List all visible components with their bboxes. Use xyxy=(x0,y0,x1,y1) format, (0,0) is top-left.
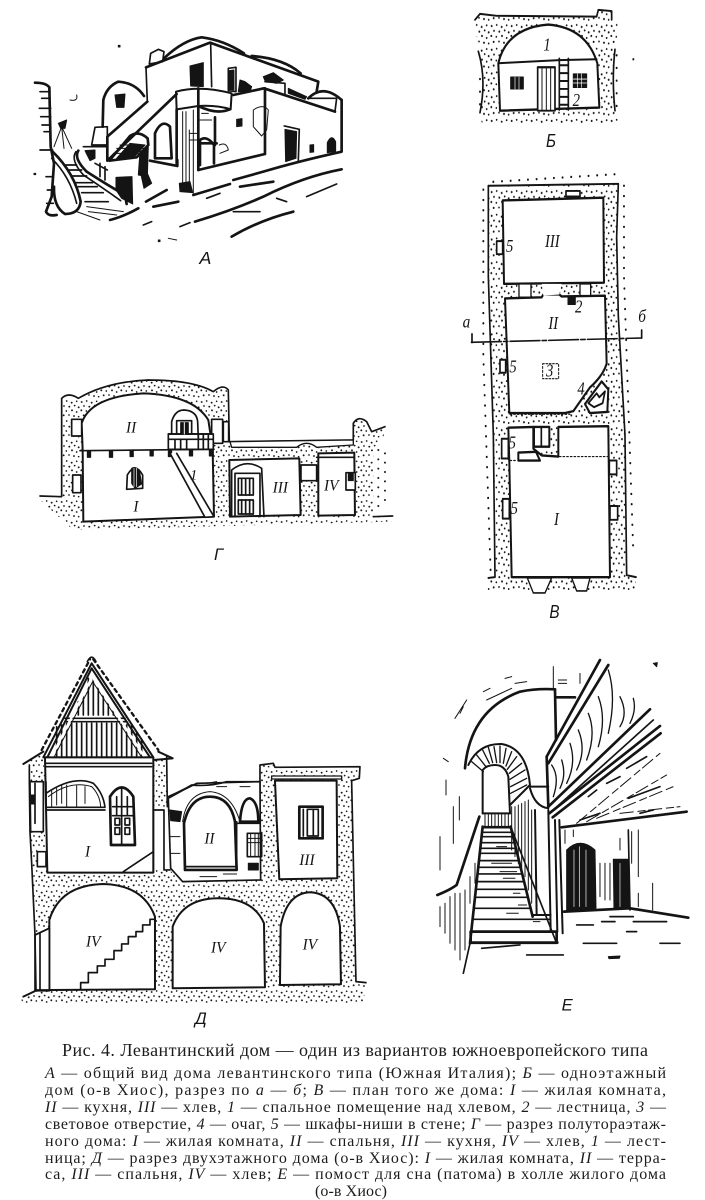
number labels: 1 xyxy=(543,37,551,55)
lower walls xyxy=(107,88,342,177)
entrance openings xyxy=(527,578,590,593)
doors xyxy=(116,126,336,204)
room I with entrance bay xyxy=(508,426,610,577)
room labels: II xyxy=(203,830,215,847)
left wall xyxy=(437,758,479,973)
left ground-floor passage xyxy=(23,928,49,997)
upper window xyxy=(172,410,198,438)
floor beam xyxy=(80,449,214,457)
room labels xyxy=(506,233,585,529)
main room xyxy=(82,393,214,522)
room II kitchen xyxy=(505,294,607,413)
section line а-б: а xyxy=(463,311,470,332)
caption title: Рис. 4. Левантинский дом — один из вариантов южноевропейского типа xyxy=(62,1040,648,1060)
room labels: 3 xyxy=(545,362,553,381)
stippled walls xyxy=(475,10,620,123)
passage and room IV xyxy=(301,453,355,516)
door xyxy=(538,67,555,111)
lower window xyxy=(127,467,143,489)
room labels: III xyxy=(544,233,560,251)
balcony xyxy=(168,434,213,449)
hearth 4 xyxy=(585,381,608,413)
ground strokes xyxy=(34,45,342,242)
roof gable xyxy=(43,663,153,757)
cupboards xyxy=(518,427,549,461)
room labels: 2 xyxy=(575,298,582,317)
tripod ornament xyxy=(54,120,72,148)
room III xyxy=(229,458,301,517)
letter В: В xyxy=(549,602,560,623)
arch over stairs xyxy=(468,744,530,813)
dotted lines xyxy=(510,283,608,577)
letter Е: Е xyxy=(562,996,574,1015)
drawing Б: section of one-storey house: 2 xyxy=(573,92,580,110)
balcony and arch xyxy=(176,88,232,193)
vault curve xyxy=(455,667,580,768)
arched window xyxy=(110,787,135,845)
room labels: IV xyxy=(323,478,340,495)
room labels xyxy=(84,830,319,957)
vaulted room xyxy=(498,25,599,111)
room labels: 5 xyxy=(509,435,516,453)
column xyxy=(530,787,563,933)
outer right dots xyxy=(378,450,385,510)
floor strokes xyxy=(482,663,680,959)
letter А: А xyxy=(198,248,211,268)
room labels: 5 xyxy=(509,358,517,377)
plan outline xyxy=(488,184,636,578)
room labels xyxy=(125,420,340,516)
room III xyxy=(272,776,342,879)
shaft hatching xyxy=(512,800,532,903)
outer dots xyxy=(483,174,633,573)
ladder xyxy=(559,59,568,110)
windows xyxy=(511,74,587,89)
room labels: IV xyxy=(210,940,227,957)
room labels: I xyxy=(84,844,91,861)
room labels: III xyxy=(298,852,316,869)
caption body: ница; Д — разрез двухэтажного дома (о-в Хиос): I — жилая комната, II — терра- xyxy=(45,1150,666,1167)
caption body: II — кухня, III — хлев, 1 — спальное помещение над хлевом, 2 — лестница, 3 — xyxy=(44,1099,667,1116)
room labels: 1 xyxy=(190,467,197,483)
room labels: III xyxy=(272,480,289,497)
ceiling xyxy=(562,753,687,827)
stair in stable xyxy=(81,919,155,989)
roof tiles xyxy=(23,657,173,764)
caption body: (о-в Хиос) xyxy=(315,1183,387,1200)
room labels: IV xyxy=(85,934,102,951)
section line а-б xyxy=(463,306,647,342)
caption body: световое отверстие, 4 — очаг, 5 — шкафы-ниши в стене; Г — разрез полутораэтаж- xyxy=(45,1116,666,1133)
drawing А: general view of the Levantine house xyxy=(34,37,342,268)
small dome xyxy=(308,91,342,112)
room labels: 5 xyxy=(511,500,518,518)
side stray dots xyxy=(480,55,633,107)
room III xyxy=(503,198,604,284)
stair 1 xyxy=(170,453,214,517)
room labels: II xyxy=(125,420,137,437)
room labels: IV xyxy=(302,936,319,953)
caption body: ного дома: I — жилая комната, II — спальня, III — кухня, IV — хлев, 1 — лест- xyxy=(45,1133,666,1150)
terrace II with arches xyxy=(168,782,262,882)
caption body: дом (о-в Хиос), разрез по а — б; В — план того же дома: I — жилая комната, xyxy=(45,1082,666,1099)
left wall with hatching xyxy=(35,83,57,215)
drawing Д: section of two-storey house xyxy=(22,657,366,1028)
drawing Е: sleeping platform in the hall xyxy=(437,660,688,1015)
letter Б: Б xyxy=(546,131,556,151)
caption body xyxy=(44,1065,667,1200)
niches xyxy=(72,419,229,493)
lower vaulted stable rooms xyxy=(49,884,341,990)
room I xyxy=(45,757,170,873)
caption xyxy=(44,1040,667,1200)
wall outline xyxy=(40,380,393,517)
letter Д: Д xyxy=(193,1009,207,1028)
left wall strip xyxy=(29,782,46,867)
platform beams xyxy=(548,709,661,817)
stippled plan walls xyxy=(487,184,636,593)
room labels: 5 xyxy=(506,238,513,256)
room labels: II xyxy=(547,315,559,333)
stair flight xyxy=(470,813,557,943)
section line а-б: б xyxy=(638,306,647,326)
room labels: I xyxy=(553,511,559,529)
drawing В: floor plan xyxy=(463,174,647,623)
roof strip xyxy=(230,440,353,447)
caption body: А — общий вид дома левантинского типа (Южная Италия); Б — одноэтажный xyxy=(44,1065,666,1082)
stippled walls xyxy=(40,380,393,530)
caption body: са, III — спальня, IV — хлев; Е — помост для сна (патома) в холле жилого дома xyxy=(45,1166,666,1183)
letter Г: Г xyxy=(214,545,225,564)
arched side building xyxy=(83,82,144,147)
sleeping floor line xyxy=(498,59,597,63)
upper storey with domes xyxy=(146,37,318,102)
drawing Г: section of one-and-a-half-storey house xyxy=(40,380,393,564)
stair mark 2 xyxy=(568,296,575,304)
niches 5 xyxy=(497,191,618,520)
door xyxy=(232,464,264,517)
curved staircase xyxy=(52,150,127,214)
room labels: I xyxy=(132,499,139,516)
passage between III and II xyxy=(519,284,591,297)
wall outline xyxy=(475,10,615,113)
stippled masses xyxy=(22,753,366,1003)
skylight 3 xyxy=(543,364,559,379)
balustrade xyxy=(547,660,634,807)
back wall and doors xyxy=(564,830,688,918)
drawing Б: section of one-storey house xyxy=(475,10,633,151)
room labels: 4 xyxy=(577,380,585,399)
